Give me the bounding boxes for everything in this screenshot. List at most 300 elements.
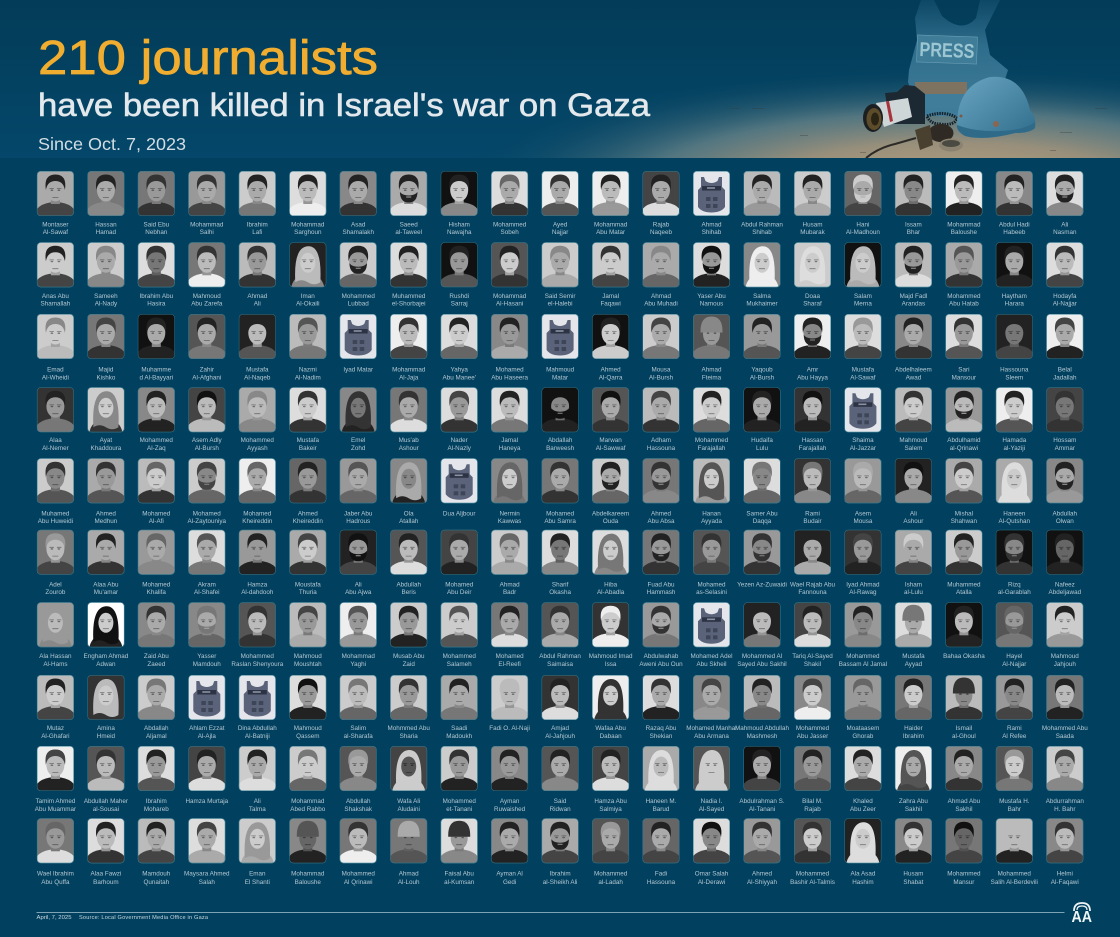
portrait: Sari Mansour	[945, 314, 982, 382]
portrait: Said Ridwan	[542, 746, 579, 813]
portrait: Ahmad Abu Muhadi: Ahmad	[651, 293, 671, 300]
row 1 of portraits	[37, 171, 1083, 236]
portrait: Tamim Ahmed Abu Muammar: Tamim Ahmed	[35, 798, 76, 805]
portrait: Shaima Al-Jazzar	[844, 387, 881, 452]
portrait: Yaser Abu Namous: Namous	[700, 301, 723, 308]
portrait: Iyad Ahmad Al-Rawag: Iyad Ahmad	[846, 582, 880, 589]
portrait: Mohamed Manhal Abu Armana: Abu Armana	[694, 733, 729, 740]
portrait: Ali Talma: Ali	[254, 798, 261, 805]
portrait: Belal Jadallah: Jadallah	[1053, 374, 1077, 382]
portrait: Helmi Al-Faqawi: Helmi	[1057, 870, 1073, 877]
portrait: Wael Ibrahim Abu Quffa: Abu Quffa	[41, 879, 70, 886]
portrait: Tamim Ahmed Abu Muammar	[35, 746, 76, 813]
portrait: Ala Asad Hashim: Hashim	[852, 879, 874, 886]
portrait: Ahmad Badr	[491, 530, 528, 596]
portrait: Ali Ashour: Ali	[910, 510, 917, 517]
portrait: Rushdi Sarraj	[441, 242, 478, 308]
portrait: Zahra Abu Sakhil: Sakhil	[905, 806, 922, 813]
portrait: Ibrahim Mohareb: Ibrahim	[146, 798, 167, 805]
portrait: Mohamed Kheireddin: Mohamed	[243, 510, 272, 517]
portrait: Zahra Abu Sakhil: Zahra Abu	[899, 798, 928, 805]
portrait: Mohammad Baloushe	[945, 171, 982, 236]
portrait: Mohamed Abu Samra: Mohamed	[546, 510, 575, 517]
portrait: Alaa Abu Mu'amar: Mu'amar	[94, 589, 118, 596]
portrait: Abdulwahab Aweni Abu Oun: Abdulwahab	[644, 653, 679, 660]
portrait: Salam Merna	[844, 242, 881, 308]
portrait: Mohammed Abu Jasser: Abu Jasser	[797, 733, 828, 740]
portrait: Yezen Az-Zuwaidi: Yezen Az-Zuwaidi	[737, 582, 787, 589]
portrait: Isham al-Lulu	[895, 530, 932, 596]
portrait: Haytham Harara	[996, 242, 1033, 308]
portrait: Said Ridwan: Ridwan	[550, 806, 571, 813]
portrait: Muhammed Al-Bayyari: d Al-Bayyari	[139, 374, 173, 382]
portrait: Ali Talma	[239, 746, 276, 813]
portrait: Rajab Naqeeb: Naqeeb	[650, 229, 673, 236]
portrait: Amina Hmeid: Amina	[97, 725, 115, 732]
portrait: Akram Al-Shafei: Al-Shafei	[194, 589, 220, 596]
portrait: Ayman Ruwaished: Ayman	[500, 798, 520, 805]
portrait: Mamdouh Qunaitah	[138, 818, 175, 886]
portrait: Mohamed Abu Haseera	[491, 314, 528, 382]
portrait: Abdurrahman H. Bahr	[1046, 746, 1084, 813]
portrait: Sameeh Al-Nady: Al-Nady	[95, 301, 118, 308]
portrait: Mohammad Yaghi: Yaghi	[350, 661, 366, 668]
portrait: Mohammed Bashir Al-Talmis: Mohammed	[796, 870, 830, 877]
portrait: Fadi O. Al-Naji	[489, 675, 530, 732]
portrait: Mahmoud Moushtah: Mahmoud	[294, 653, 322, 660]
portrait: Mohammad Al-Hasani	[491, 242, 528, 308]
portrait: Mohamed Al-Afi: Al-Afi	[149, 518, 164, 525]
portrait: Bahaa Okasha	[943, 602, 985, 660]
portrait: Abdulrahman S. Al-Tanani	[739, 746, 785, 813]
portrait: Emad Al-Wheidi: Al-Wheidi	[42, 374, 69, 382]
portrait: Asad Shamalakh: Asad	[351, 222, 366, 228]
portrait: Emel Zohd: Emel	[351, 437, 365, 444]
portrait: Said Samir el-Halebi: Said Semir	[545, 293, 575, 300]
portrait: Mohammad Sarghoun: Mohammad	[291, 222, 325, 228]
portrait: Mohammed Salameh	[441, 602, 478, 668]
portrait: Mohammed Raslan Shenyoura: Mohammed	[241, 653, 274, 660]
portrait: Abdurrahman H. Bahr: H. Bahr	[1054, 806, 1075, 813]
portrait: Fadi Hassouna	[642, 818, 680, 886]
portrait: Abdulhamid al-Qrinawi: al-Qrinawi	[950, 445, 978, 452]
portrait: Hayel Al-Najjar: Hayel	[1006, 653, 1022, 660]
portrait: Doaa Sharaf	[794, 242, 831, 308]
portrait: Mohamed Abu Haseera: Abu Haseera	[491, 374, 528, 382]
portrait: Ahmad Ali	[239, 242, 276, 308]
icon: helmet	[957, 77, 1035, 138]
portrait: Hiba Al-Abadla	[592, 530, 629, 596]
portrait: Rami Budair: Budair	[803, 518, 822, 525]
portrait: Abdelkareem Ouda: Ouda	[603, 518, 619, 525]
portrait: Hamada al-Yaziji: Hamada	[1002, 437, 1027, 444]
portrait: Ahmad Al-Louh: Al-Louh	[398, 879, 420, 886]
portrait: Saeed al-Taweel: Saeed	[400, 222, 418, 228]
portrait: Asem Mousa	[844, 458, 881, 525]
portrait: Haneen M. Barud: Haneen M.	[646, 798, 677, 805]
portrait: Muhammed Atalla: Atalla	[956, 589, 972, 596]
portrait: Sameeh Al-Nady: Sameeh	[94, 293, 118, 300]
portrait: Mohammed Al Qrinawi: Al Qrinawi	[344, 879, 373, 886]
portrait: Muhammed el-Shorbajei: Muhammed	[392, 293, 426, 300]
portrait: Ala Asad Hashim	[844, 818, 881, 886]
portrait: Ismail al-Ghoul: al-Ghoul	[952, 733, 976, 740]
portrait: Mohamed Adel Abu Skheil: Mohamed Adel	[690, 653, 733, 660]
portrait: Haneen M. Barud	[642, 746, 680, 813]
portrait: Marwan Al-Sawwaf: Al-Sawwaf	[596, 445, 626, 452]
portrait: Said Ebu Nebhan	[138, 171, 175, 236]
portrait: Rizq al-Garablah: Rizq	[1008, 582, 1021, 589]
portrait: Mohamed Manhal Abu Armana	[686, 675, 737, 740]
portrait: Doaa Sharaf: Sharaf	[803, 301, 822, 308]
portrait: Mamdouh Qunaitah: Qunaitah	[144, 879, 170, 886]
portrait: Jamal Haneya: Haneya	[499, 445, 521, 452]
portrait: Ahmad Abu Muhadi	[642, 242, 680, 308]
portrait: Sharif Okasha: Okasha	[549, 589, 571, 596]
portrait: Ibrahim Abu Hasira: Hasira	[147, 301, 166, 308]
portrait: Hamza Abu Salmiya: Salmiya	[599, 806, 622, 813]
portrait: Alaa Al-Nemer	[37, 387, 74, 452]
portrait: Mohammed Al Sayed Abu Sakhil: Mohammed Al	[742, 653, 782, 660]
portrait: Adel Zourob: Zourob	[45, 589, 66, 596]
portrait: Abdallah Aljamal: Abdallah	[144, 725, 169, 732]
portrait: Ibrahim al-Sheikh Ali	[542, 818, 579, 886]
portrait: Mustafa Al-Naqeb: Mustafa	[246, 366, 269, 374]
portrait: Mustafa Al-Sawaf: Al-Sawaf	[850, 374, 876, 382]
portrait: Mohammed Bassam Al Jamal: Bassam Al Jamal	[839, 661, 887, 668]
portrait: Majd Fadl Arandas	[895, 242, 932, 308]
portrait: Husam Shabat	[895, 818, 932, 886]
portrait: Hassouna Sleem: Hassouna	[1000, 366, 1029, 374]
portrait: Salim al-Sharafa: al-Sharafa	[344, 733, 373, 740]
portrait: Ali Ashour	[895, 458, 932, 525]
portrait: Mohammed et-Tanani: et-Tanani	[446, 806, 472, 813]
portrait: Jaber Abu Hadrous	[340, 458, 377, 525]
portrait: Mohammed Abu Jasser: Mohammed	[796, 725, 830, 732]
portrait: Mohamed Al-Afi	[138, 458, 175, 525]
portrait: Ali Abu Ajwa: Ali	[355, 582, 362, 589]
portrait: Mohmmed Abu Sharia: Mohmmed Abu	[388, 725, 430, 732]
portrait: Rami Al Refee: Rami	[1007, 725, 1022, 732]
portrait: Anas Abu Shamallah: Shamallah	[41, 301, 71, 308]
portrait: Salma Mukhaimer: Mukhaimer	[746, 301, 778, 308]
portrait: Emad Al-Wheidi: Emad	[47, 366, 64, 374]
portrait: Mohammed Farajallah: Farajallah	[698, 445, 726, 452]
portrait: Abdullah Shakshak	[340, 746, 377, 813]
portrait: Moataasem Ghorab	[844, 675, 881, 740]
illustration: press vest, helmet, camera and microphone	[863, 0, 1035, 158]
portrait: Hamada al-Yaziji: al-Yaziji	[1004, 445, 1025, 452]
portrait: Ibrahim Mohareb	[138, 746, 175, 813]
portrait: Mohamed Abu Deir	[441, 530, 478, 596]
portrait: Tariq Al-Sayed Shakil: Shakil	[804, 661, 821, 668]
portrait: Majid Kishko: Majid	[98, 366, 114, 374]
portrait: Mohammad Abu Matar: Abu Matar	[596, 229, 625, 236]
portrait: Ahmad Al-Louh: Ahmad	[399, 870, 419, 877]
date range: Since Oct. 7, 2023	[38, 134, 186, 154]
portrait: Dua Aljbour: Dua Aljbour	[443, 510, 475, 517]
portrait: Abdallah Barweesh	[542, 387, 579, 452]
portrait: Mohammed Ayyash: Mohammed	[241, 437, 274, 444]
portrait: Issam Bhar: Bhar	[907, 229, 920, 236]
portrait: Hassan Farajallah: Farajallah	[799, 445, 827, 452]
portrait: Haider Ibrahim: Ibrahim	[903, 733, 924, 740]
portrait: Khaled Abu Zeer	[844, 746, 881, 813]
portrait: Fuad Abu Hammash: Fuad Abu	[648, 582, 675, 589]
portrait: Rushdi Sarraj: Rushdi	[449, 293, 469, 300]
portrait: Amjad Al-Jahjouh	[542, 675, 579, 740]
portrait: Mahmoud Moushtah	[289, 602, 326, 668]
portrait: Mohamed Al-Afi: Mohamed	[142, 510, 171, 517]
portrait: Abdullah Maher al-Sousai: Abdullah Maher	[84, 798, 128, 805]
portrait: Yahya Abu Manee'	[441, 314, 478, 382]
portrait: Sharif Okasha	[542, 530, 579, 596]
portrait: Sharif Okasha: Sharif	[552, 582, 569, 589]
portrait: Mohammed Al-Zaq	[138, 387, 175, 452]
portrait: Mohammad Al-Hasani: Mohammad	[493, 293, 527, 300]
portrait: Abdul Rahman Shihab	[741, 171, 783, 236]
portrait: Eman El Shanti	[239, 818, 276, 886]
portrait: Abdulrahman S. Al-Tanani: Al-Tanani	[749, 806, 775, 813]
portrait: Mohammed Lubbad: Mohammed	[342, 293, 375, 300]
portrait: Fadi O. Al-Naji: Fadi O. Al-Naji	[489, 725, 530, 732]
portrait: Yaqoub Al-Bursh: Al-Bursh	[750, 374, 775, 382]
portrait: Ahmed Kheireddin: Ahmed	[298, 510, 318, 517]
portrait: Ahmad Al-Louh	[390, 818, 427, 886]
portrait: Muhammed Atalla: Muhammed	[947, 582, 981, 589]
portrait: Ibrahim al-Sheikh Ali: Ibrahim	[550, 870, 571, 877]
portrait: Alaa Fawzi Barhoum	[87, 818, 124, 886]
portrait: Wafa Ali Aludaini	[390, 746, 427, 813]
portrait: Mohamed Kheireddin	[239, 458, 276, 525]
portrait: Ahmed Abu Absa	[642, 458, 680, 525]
portrait: Razaq Abu Shekian	[642, 675, 680, 740]
portrait: Hamada al-Yaziji	[996, 387, 1033, 452]
portrait: Mohammad Al-Jaja: Al-Jaja	[399, 374, 419, 382]
portrait: Mahmoud Moushtah: Moushtah	[294, 661, 322, 668]
portrait: Ala Hassan Al-Hams: Al-Hams	[43, 661, 67, 668]
portrait: Abdullah Olwan: Olwan	[1056, 518, 1074, 525]
portrait: Husam Mubarak: Mubarak	[800, 229, 826, 236]
portrait: Mustafa Al-Naqeb	[239, 314, 276, 382]
portrait: Mousa Al-Bursh	[642, 314, 680, 382]
portrait: Mustafa Al-Naqeb: Al-Naqeb	[244, 374, 271, 382]
title: 210 journalists	[38, 32, 378, 85]
portrait: Abdul Rahman Saimaisa: Saimaisa	[547, 661, 574, 668]
portrait: Ali Talma: Talma	[249, 806, 266, 813]
portrait: Mohammed Abu Hatab: Abu Hatab	[949, 301, 979, 308]
portrait: Mamdouh Qunaitah: Mamdouh	[142, 870, 171, 877]
portrait: Mohammed Salih Al-Berdevili	[991, 818, 1038, 886]
portrait: Abdulrahman S. Al-Tanani: Abdulrahman S.	[739, 798, 785, 805]
portrait: Adham Hassouna: Hassouna	[647, 445, 676, 452]
portrait: Mohammed et-Tanani: Mohammed	[443, 798, 476, 805]
portrait: Mustafa Bakeir: Bakeir	[299, 445, 317, 452]
portrait: Zaid Abu Zaeed: Zaid Abu	[144, 653, 169, 660]
portrait: Majid Kishko: Kishko	[96, 374, 116, 382]
portrait: Ola Atallah	[390, 458, 427, 525]
portrait: Shaima Al-Jazzar: Shaima	[852, 437, 874, 444]
row 4 of portraits	[37, 387, 1083, 452]
portrait: Ahmad Abu Sakhil	[945, 746, 982, 813]
portrait: Amr Abu Hayya: Abu Hayya	[797, 374, 828, 382]
portrait: Salim al-Sharafa: Salim	[350, 725, 366, 732]
portrait: Said Ebu Nebhan: Said Ebu	[144, 222, 170, 228]
portrait: Mahmoud Qassem: Qassem	[296, 733, 320, 740]
portrait: Haider Ibrahim: Haider	[904, 725, 923, 732]
portrait: Bahaa Okasha: Bahaa Okasha	[943, 653, 985, 660]
portrait: Mishal Shahwan	[945, 458, 982, 525]
portrait: Abdul Hadi Habeeb: Habeeb	[1003, 229, 1026, 236]
portrait: Alaa Al-Nemer: Al-Nemer	[42, 445, 69, 452]
portrait: Fadi Hassouna: Fadi	[655, 870, 667, 877]
portrait: Mohammed Mansur: Mansur	[953, 879, 974, 886]
portrait: Hassan Farajallah	[794, 387, 831, 452]
portrait: Mohammad Baloushe: Baloushe	[951, 229, 978, 236]
portrait: Nazmi Al-Nadim	[289, 314, 326, 382]
portrait: Mahmoud Jahjouh: Jahjouh	[1054, 661, 1076, 668]
portrait: Jamal Haneya: Jamal	[501, 437, 518, 444]
portrait: Mohammad Al-Jaja	[390, 314, 427, 382]
portrait: Nermin Kawwas	[491, 458, 528, 525]
portrait: Mahmoud Abu Zarefa: Mahmoud	[193, 293, 221, 300]
portrait: Mohammed al-Ladah: Mohammed	[594, 870, 628, 877]
portrait: Mustafa H. Bahr: Mustafa H.	[999, 798, 1030, 805]
portrait: Mohamed Abu Haseera: Mohamed	[496, 366, 524, 374]
portrait: Nadia I. Al-Sayed	[693, 746, 730, 813]
portrait: Ahlam Ezzat Al-Ajla	[188, 675, 225, 740]
portrait: Mohmmed Abu Sharia: Sharia	[400, 733, 418, 740]
portrait: Ahmad Fteima: Ahmad	[702, 366, 722, 374]
portrait: Yaser Abu Namous	[693, 242, 730, 308]
portrait: Abdallah Barweesh: Barweesh	[546, 445, 575, 452]
portrait: Ahmed Al-Qarra: Al-Qarra	[599, 374, 623, 382]
portrait: Ismail al-Ghoul: Ismail	[956, 725, 972, 732]
portrait: Mohammad Abed Rabbo: Abed Rabbo	[290, 806, 326, 813]
portrait: Zahir Al-Afghani: Zahir	[200, 366, 214, 374]
portrait: Iyad Ahmad Al-Rawag: Al-Rawag	[849, 589, 877, 596]
row 6 of portraits	[37, 530, 1083, 596]
portrait: Mousa Al-Bursh: Mousa	[652, 366, 671, 374]
portrait: Mohamed El-Reefi	[491, 602, 528, 668]
portrait: Ayed Najjar	[542, 171, 579, 236]
portrait: Nafeez Abdeljawad: Nafeez	[1055, 582, 1075, 589]
portrait: Muhamed Abu Huweidi: Muhamed	[41, 510, 70, 517]
portrait: Issam Bhar	[895, 171, 932, 236]
portrait: Salma Mukhaimer: Salma	[753, 293, 771, 300]
portrait: Amr Abu Hayya: Amr	[807, 366, 818, 374]
portrait: Ali Abu Ajwa	[340, 530, 377, 596]
portrait: Mohammad Yaghi: Mohammad	[342, 653, 375, 660]
portrait: Mus'ab Ashour: Ashour	[399, 445, 419, 452]
portrait: Hudaifa Lulu: Hudaifa	[751, 437, 773, 444]
portrait: Mutaz Al-Ghafari: Mutaz	[47, 725, 64, 732]
portrait: Hamza Abu Salmiya: Hamza Abu	[594, 798, 627, 805]
portrait: Hassan Hamad	[87, 171, 124, 236]
portrait: Nazmi Al-Nadim: Al-Nadim	[295, 374, 321, 382]
portrait: Mohamed Al-Zaytouniya: Al-Zaytouniya	[188, 518, 227, 525]
portrait: Adel Zourob: Adel	[49, 582, 62, 589]
portrait: Hassouna Sleem	[996, 314, 1033, 382]
row 9 of portraits	[35, 746, 1084, 813]
portrait: Mohammed Salameh: Mohammed	[443, 653, 476, 660]
portrait: Muhammed Al-Bayyari	[138, 314, 175, 382]
portrait: Belal Jadallah: Belal	[1058, 366, 1072, 374]
portrait: Salma Mukhaimer	[744, 242, 780, 308]
portrait: Moustafa Thuria: Moustafa	[295, 582, 321, 589]
portrait: Husam Shabat: Husam	[903, 870, 923, 877]
portrait: Abdelhaleem Awad	[895, 314, 932, 382]
portrait: Zahir Al-Afghani	[188, 314, 225, 382]
portrait: Abdul Hadi Habeeb	[996, 171, 1033, 236]
portrait: Mahmoud Jahjouh: Mahmoud	[1051, 653, 1079, 660]
portrait: Bilal M. Rajab: Rajab	[804, 806, 821, 813]
portrait: Abdulhamid al-Qrinawi	[945, 387, 982, 452]
portrait: Jamal Faqawi	[592, 242, 629, 308]
portrait: Ali Nasman	[1046, 171, 1083, 236]
portrait: Engham Ahmad Adwan: Adwan	[96, 661, 116, 668]
portrait: Mus'ab Ashour: Mus'ab	[399, 437, 419, 444]
portrait: Hayel Al-Najjar: Al-Najjar	[1002, 661, 1026, 668]
portrait: Anas Abu Shamallah	[37, 242, 74, 308]
portrait: Mohammed Sobeh: Mohammed	[493, 222, 527, 228]
portrait: Yasser Mamdouh	[188, 602, 225, 668]
portrait: Ibrahim Mohareb: Mohareb	[144, 806, 169, 813]
portrait: Hanan Ayyada: Hanan	[702, 510, 721, 517]
portrait: Mahmoud Abu Zarefa: Abu Zarefa	[191, 301, 223, 308]
portrait: Asem Adly Al-Bursh: Al-Bursh	[195, 445, 219, 452]
portrait: Jaber Abu Hadrous: Jaber Abu	[344, 510, 373, 517]
portrait: Abdallah Barweesh: Abdallah	[548, 437, 573, 444]
portrait: Hodayfa Al-Najjar: Al-Najjar	[1053, 301, 1077, 308]
portrait: Asem Mousa: Mousa	[853, 518, 873, 525]
portrait: Saadi Madoukh: Madoukh	[446, 733, 473, 740]
portrait: Rushdi Sarraj: Sarraj	[451, 301, 468, 308]
portrait: Omar Salah Al-Derawi: Al-Derawi	[698, 879, 725, 886]
portrait: Abdullah Maher al-Sousai	[84, 746, 128, 813]
portrait: Abdul Rahman Saimaisa	[539, 602, 581, 668]
portrait: Hassan Hamad: Hamad	[96, 229, 117, 236]
portrait: Anas Abu Shamallah: Anas Abu	[42, 293, 69, 300]
portrait: Mohammed al-Ladah	[592, 818, 629, 886]
portrait: Mohamed Abu Samra	[542, 458, 579, 525]
row 8 of portraits	[37, 675, 1088, 740]
portrait: Amina Hmeid	[87, 675, 124, 740]
portrait: Samer Abu Daqqa: Samer Abu	[746, 510, 778, 517]
portrait: Fuad Abu Hammash	[642, 530, 680, 596]
portrait: Mustafa Ayyad: Mustafa	[902, 653, 925, 660]
portrait: Hassouna Sleem: Sleem	[1005, 374, 1023, 382]
portrait: Abdullah Beris: Abdullah	[396, 582, 421, 589]
portrait: Abdelkareem Ouda: Abdelkareem	[592, 510, 629, 517]
footer source: Source: Local Government Media Office in Gaza	[79, 915, 209, 921]
portrait: Abdul Rahman Saimaisa: Abdul Rahman	[539, 653, 581, 660]
portrait: Haider Ibrahim	[895, 675, 932, 740]
portrait: Ahmed Medhun	[87, 458, 124, 525]
portrait: Mohamed Khalifa	[138, 530, 175, 596]
portrait: Mohamed as-Selasini	[693, 530, 730, 596]
portrait: Mohammed Mansur	[945, 818, 982, 886]
portrait: Faisal Abu al-Kumsan	[441, 818, 478, 886]
portrait: Ayed Najjar: Najjar	[552, 229, 568, 236]
portrait: Mohammed Lubbad: Lubbad	[348, 301, 369, 308]
portrait: Ahmad Shihab	[693, 171, 730, 236]
portrait: Musab Abu Zaid: Zaid	[403, 661, 415, 668]
portrait: Moustafa Thuria: Thuria	[299, 589, 317, 596]
portrait: Mohammed Abu Jasser	[794, 675, 831, 740]
portrait: Mohammad Abu Matar: Mohammad	[594, 222, 628, 228]
portrait: Jamal Haneya	[491, 387, 528, 452]
